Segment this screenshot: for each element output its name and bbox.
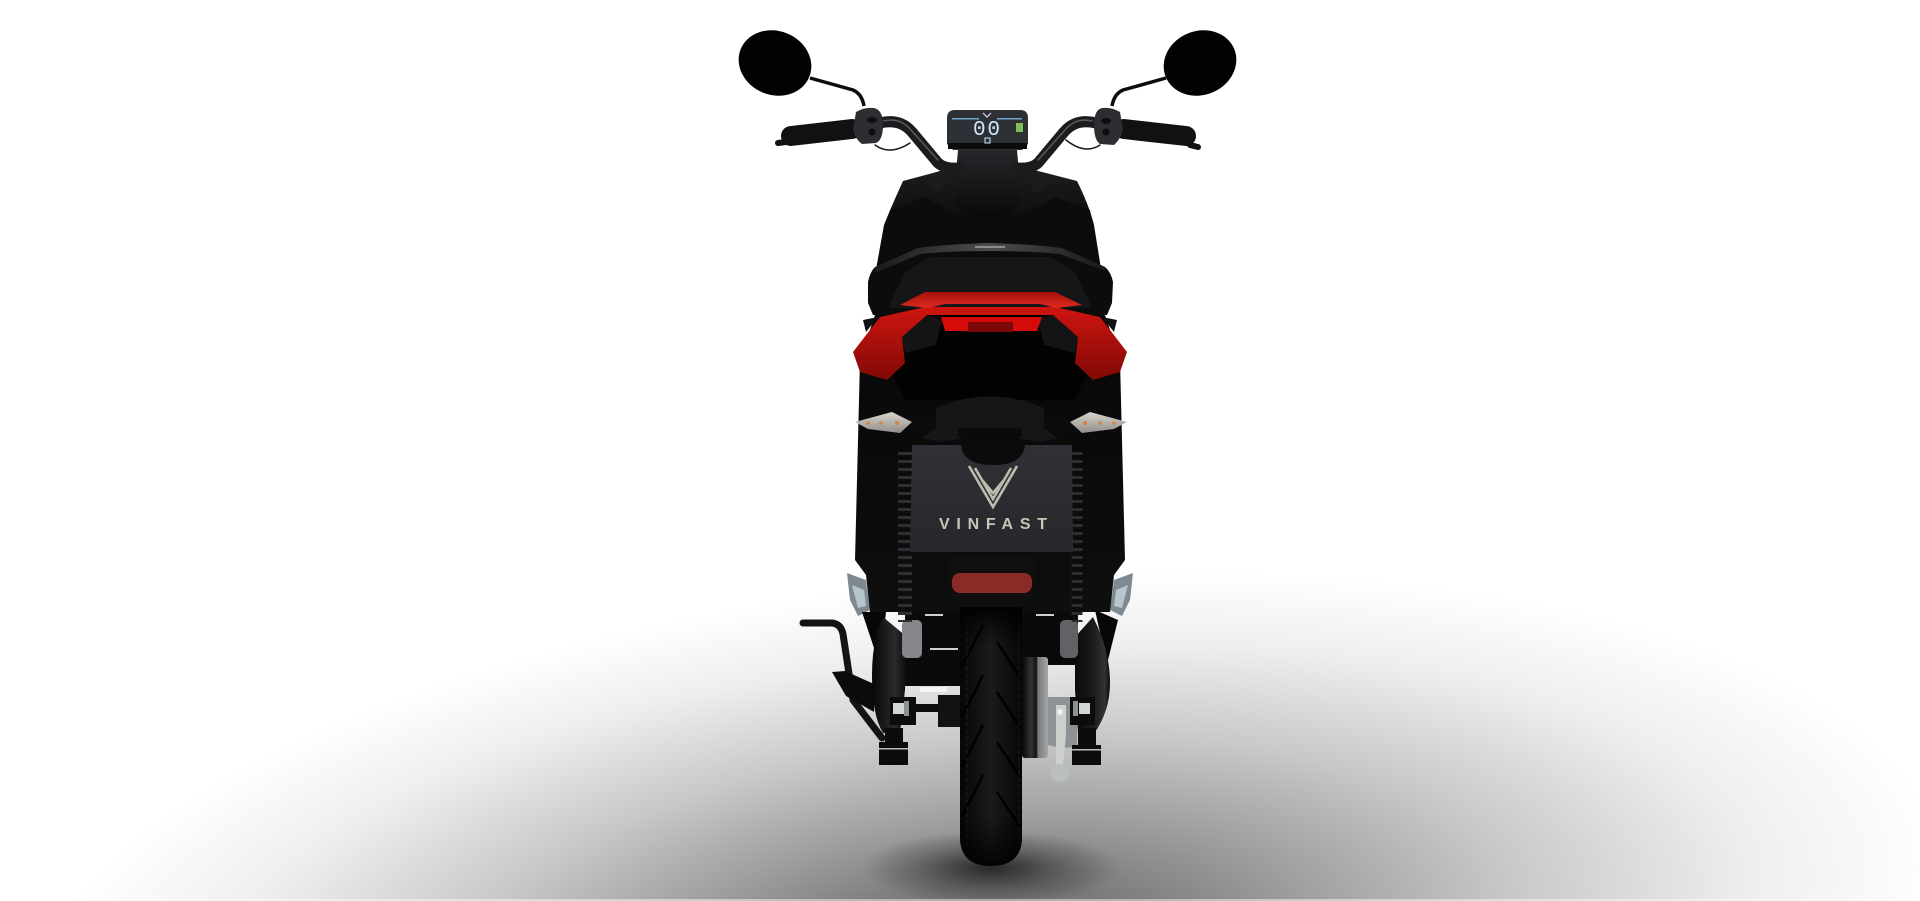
red seat trim (900, 292, 1082, 308)
brand wordmark: VINFAST (939, 516, 1047, 533)
ground shadow (0, 400, 1920, 901)
red rear fairing (853, 307, 1127, 380)
brake drum (1022, 657, 1048, 758)
turn signal stalks (912, 396, 1068, 442)
turn signal left (855, 412, 912, 433)
instrument display (947, 110, 1028, 150)
silver brake plate (1048, 697, 1077, 748)
black wedges behind side covers (862, 610, 1118, 666)
handlebar stem (955, 150, 1020, 217)
seat rail (868, 243, 1113, 315)
handlebar tubes (875, 120, 1100, 168)
foot blocks (879, 728, 1101, 765)
turn signal right (1070, 412, 1127, 433)
silver shock bodies (902, 620, 1078, 658)
axle bolts (890, 697, 1095, 725)
small black tabs beside fairing (863, 317, 1117, 332)
right grip and switch (1094, 108, 1198, 147)
brake light (941, 317, 1042, 332)
speed readout: 00 (973, 119, 1000, 142)
upper body (875, 168, 1102, 275)
rear black bodywork (855, 300, 1125, 612)
reflector housing (947, 555, 1037, 607)
right mirror (1112, 19, 1246, 107)
side covers (872, 617, 1110, 735)
dark centre under tail light (880, 305, 1100, 400)
dark panels beside tail light (902, 315, 1078, 353)
lower reflectors left and right (847, 573, 1133, 616)
kickstand lever (803, 623, 882, 738)
scooter (729, 19, 1246, 866)
vinfast logo (969, 466, 1017, 507)
left mirror (729, 19, 864, 107)
left grip and switch (778, 108, 883, 144)
number plate (910, 445, 1073, 552)
coil springs (905, 452, 1077, 622)
brake arm silver (1051, 705, 1069, 782)
frame centre and axle (905, 605, 1078, 727)
rear tire (960, 607, 1022, 866)
